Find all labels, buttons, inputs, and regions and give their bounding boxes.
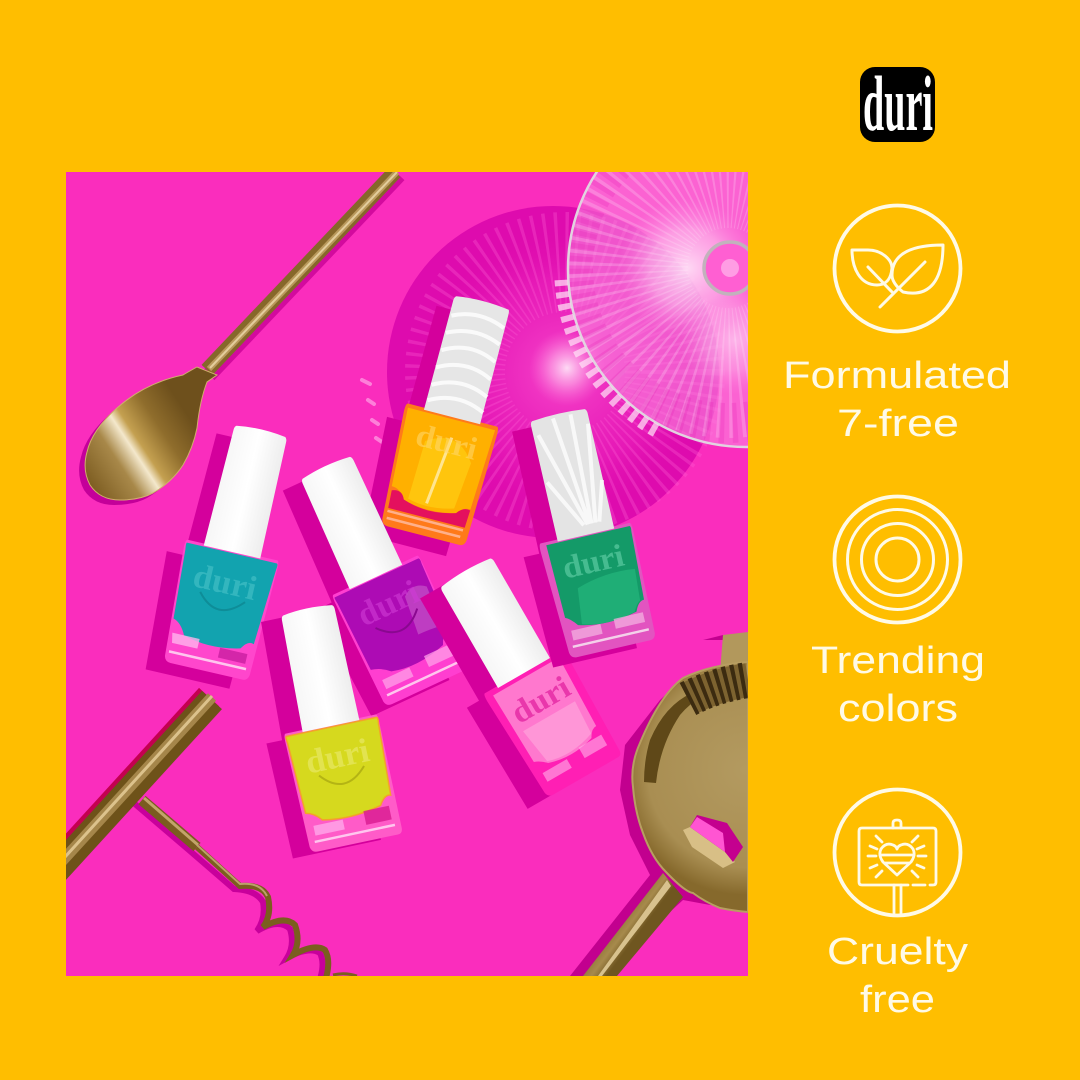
nail polish: pink: duri: [505, 668, 576, 730]
feature: formulated 7-free: [783, 206, 1011, 445]
panel: product photo: [66, 172, 748, 976]
nail polish: purple: duri: [352, 573, 425, 634]
nail polish: orange: duri: [412, 416, 481, 467]
icon: leaves: [834, 206, 960, 332]
glass shadow with caustic ribs: [362, 206, 719, 538]
label: colors: colors: [838, 688, 958, 730]
spoon: [79, 172, 399, 505]
nail polish: teal: duri: [190, 557, 260, 608]
corkscrew: [135, 798, 357, 979]
nail polish: pink: [420, 558, 620, 809]
logo: duri: [860, 60, 935, 147]
label: formulated: Formulated: [783, 355, 1011, 397]
logo: duri: duri: [863, 60, 933, 147]
nail polish: yellow: [261, 605, 402, 858]
label: 7-free: 7-free: [837, 403, 959, 445]
nail polish: yellow: duri: [302, 732, 373, 782]
nail polish: orange: [370, 296, 509, 556]
label: trending: Trending: [811, 640, 985, 682]
coupe glass: [554, 172, 748, 448]
feature: trending colors: [811, 496, 985, 730]
nail polish: purple: [282, 456, 462, 716]
icon: heart sign: [834, 790, 960, 916]
nail polish: green: duri: [559, 537, 627, 586]
icon: concentric circles: [834, 496, 960, 622]
bar strainer: [570, 632, 748, 976]
corkscrew bar: [51, 696, 212, 873]
nail polish: teal: [146, 426, 286, 689]
label: free: free: [860, 979, 935, 1021]
nail polish: green: [512, 409, 655, 668]
feature: cruelty free: [827, 790, 968, 1021]
label: cruelty: Cruelty: [827, 931, 968, 973]
